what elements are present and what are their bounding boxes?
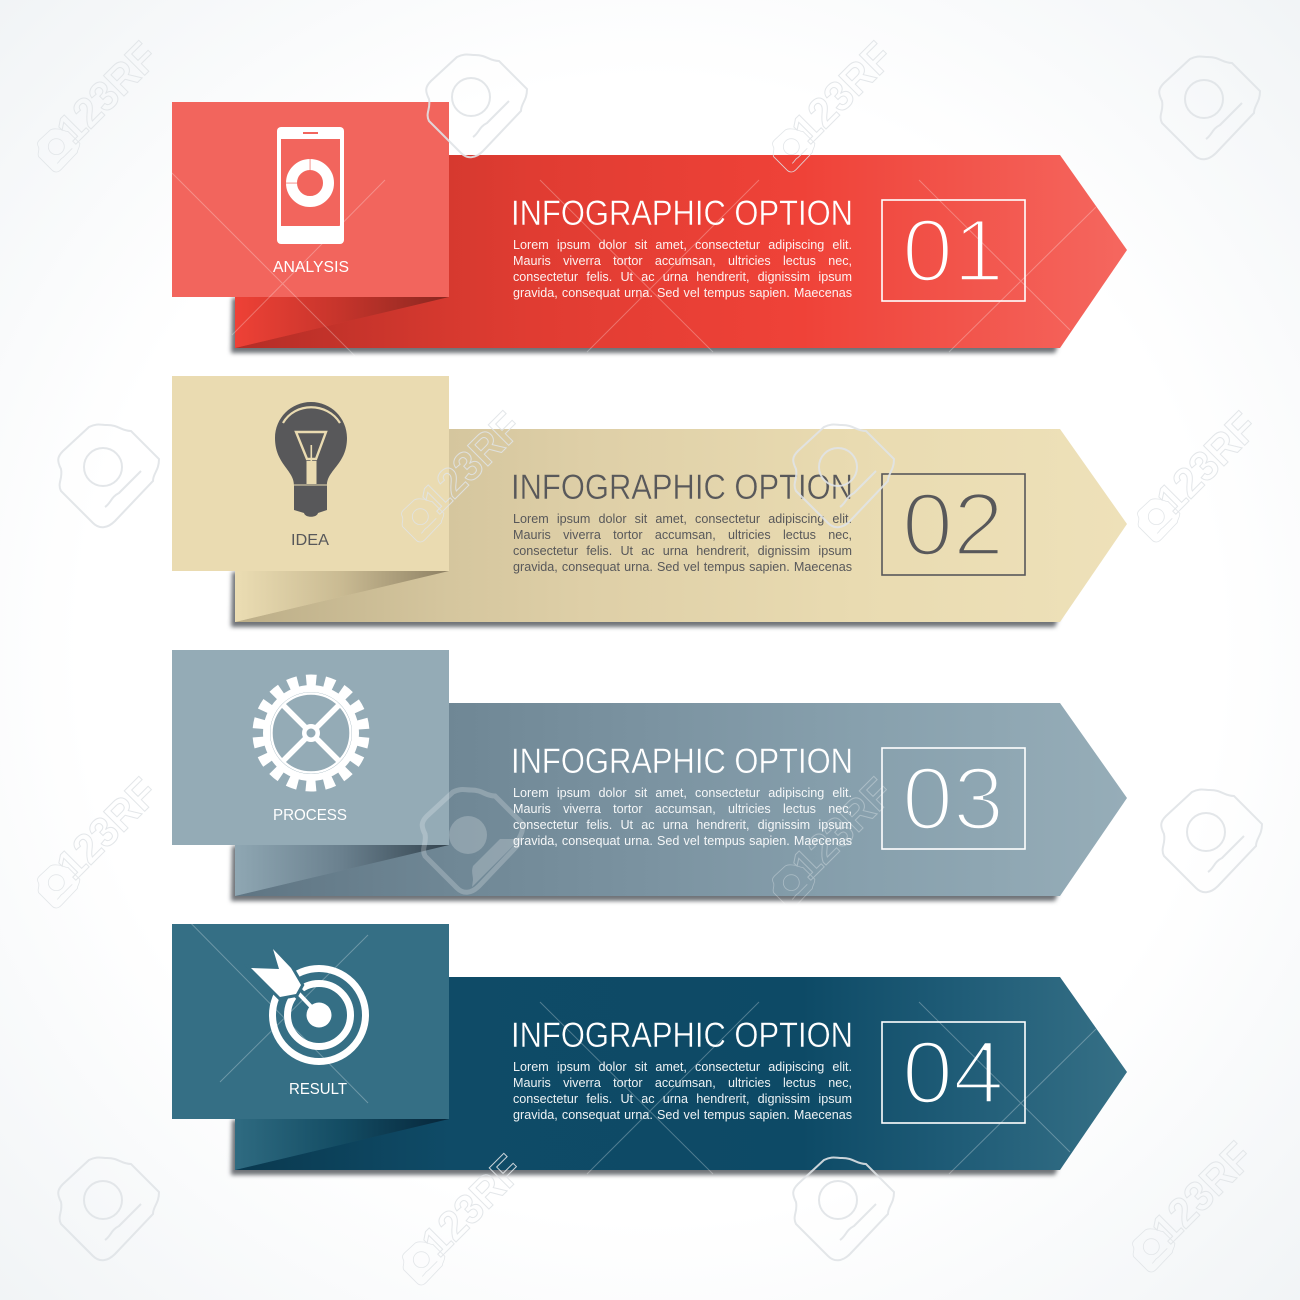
heading: INFOGRAPHIC OPTION bbox=[511, 1016, 853, 1055]
body text: gravida, consequat urna. Sed vel tempus sapien. Maecenas bbox=[513, 834, 852, 848]
square tab bbox=[172, 924, 449, 1119]
lower fold bbox=[235, 297, 449, 348]
icon: target with arrow bbox=[251, 949, 366, 1062]
arrow band bbox=[235, 977, 1127, 1170]
body text bbox=[513, 238, 852, 300]
drop shadow bbox=[231, 572, 1060, 627]
body text: consectetur felis. Ut ac urna hendrerit, dignissim ipsum bbox=[513, 1092, 852, 1106]
label: idea: IDEA bbox=[291, 532, 330, 549]
upper fold wedge bbox=[235, 1119, 449, 1170]
drop shadow bbox=[231, 1120, 1060, 1175]
lower fold bbox=[235, 845, 449, 896]
square tab bbox=[172, 376, 449, 571]
body text: Mauris viverra tortor accumsan, ultricies lectus nec, bbox=[513, 528, 852, 542]
upper fold wedge bbox=[235, 845, 449, 896]
body text: Lorem ipsum dolor sit amet, consectetur adipiscing elit. bbox=[513, 786, 852, 800]
arrow band bbox=[235, 155, 1127, 348]
heading: INFOGRAPHIC OPTION bbox=[511, 468, 853, 507]
icon: light bulb bbox=[275, 402, 347, 517]
body text: Lorem ipsum dolor sit amet, consectetur adipiscing elit. bbox=[513, 1060, 852, 1074]
heading: INFOGRAPHIC OPTION bbox=[511, 194, 853, 233]
drop shadow bbox=[231, 846, 1060, 901]
panel: option 04 result bbox=[172, 924, 1127, 1178]
number box bbox=[882, 200, 1025, 301]
label: analysis: ANALYSIS bbox=[273, 259, 349, 276]
body text: Lorem ipsum dolor sit amet, consectetur adipiscing elit. bbox=[513, 238, 852, 252]
body text: consectetur felis. Ut ac urna hendrerit, dignissim ipsum bbox=[513, 270, 852, 284]
panel: option 02 idea bbox=[172, 376, 1127, 630]
panel: option 01 analysis bbox=[172, 102, 1127, 356]
body text: consectetur felis. Ut ac urna hendrerit, dignissim ipsum bbox=[513, 544, 852, 558]
panel: option 03 process bbox=[172, 650, 1127, 904]
arrow band bbox=[235, 703, 1127, 896]
heading: INFOGRAPHIC OPTION bbox=[511, 742, 853, 781]
square tab bbox=[172, 650, 449, 845]
body text bbox=[513, 512, 852, 574]
lower fold bbox=[235, 571, 449, 622]
body text: gravida, consequat urna. Sed vel tempus sapien. Maecenas bbox=[513, 560, 852, 574]
body text: Mauris viverra tortor accumsan, ultricies lectus nec, bbox=[513, 254, 852, 268]
body text bbox=[513, 786, 852, 848]
body text: consectetur felis. Ut ac urna hendrerit, dignissim ipsum bbox=[513, 818, 852, 832]
number box: 01 bbox=[902, 200, 1004, 300]
number box: 04 bbox=[902, 1022, 1004, 1122]
lower fold bbox=[235, 1119, 449, 1170]
icon: gear bbox=[254, 676, 368, 790]
number box bbox=[882, 748, 1025, 849]
number box: 02 bbox=[902, 474, 1004, 574]
body text: Mauris viverra tortor accumsan, ultricies lectus nec, bbox=[513, 802, 852, 816]
arrow band bbox=[235, 429, 1127, 622]
upper fold wedge bbox=[235, 297, 449, 348]
thin diagonal watermark lines bbox=[172, 173, 1096, 1174]
stamps over the panels bbox=[422, 769, 902, 908]
label: process: PROCESS bbox=[273, 807, 347, 824]
number box bbox=[882, 1022, 1025, 1123]
body text: gravida, consequat urna. Sed vel tempus sapien. Maecenas bbox=[513, 286, 852, 300]
drop shadow bbox=[231, 298, 1060, 353]
icon: smartphone with donut chart bbox=[277, 127, 344, 244]
body text: gravida, consequat urna. Sed vel tempus sapien. Maecenas bbox=[513, 1108, 852, 1122]
square tab bbox=[172, 102, 449, 297]
number box: 03 bbox=[902, 748, 1004, 848]
body text bbox=[513, 1060, 852, 1122]
number box bbox=[882, 474, 1025, 575]
upper fold wedge bbox=[235, 571, 449, 622]
label: result: RESULT bbox=[289, 1081, 348, 1098]
body text: Lorem ipsum dolor sit amet, consectetur adipiscing elit. bbox=[513, 512, 852, 526]
body text: Mauris viverra tortor accumsan, ultricies lectus nec, bbox=[513, 1076, 852, 1090]
